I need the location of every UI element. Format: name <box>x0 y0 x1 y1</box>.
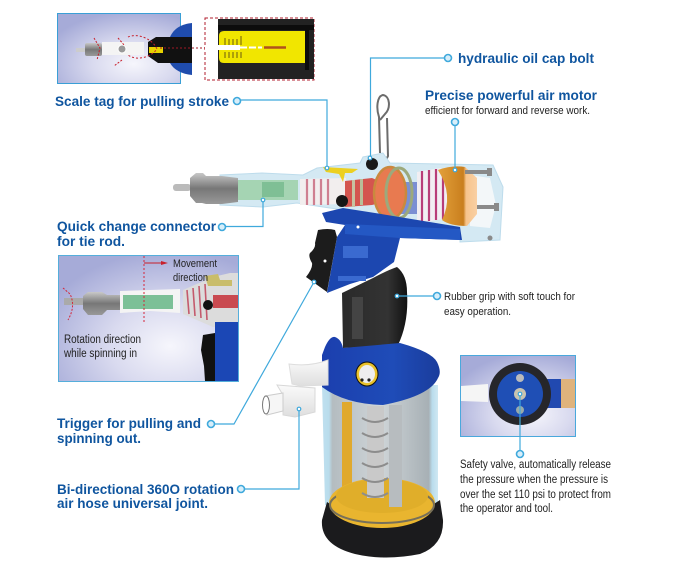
panel: safety valve top view <box>460 356 576 436</box>
swivel air joint <box>262 360 328 417</box>
heading: air hose joint: air hose universal joint. <box>57 496 208 511</box>
leader markers <box>208 54 524 492</box>
text: movement direction: direction <box>173 272 208 284</box>
text: safety valve: the operator and tool. <box>460 503 553 515</box>
yellow piston disc <box>329 478 435 528</box>
spring <box>362 406 388 498</box>
text: safety valve: Safety valve, automatically release <box>460 459 611 471</box>
text: rotation direction: while spinning in <box>63 348 137 360</box>
blue reservoir cap <box>322 337 440 405</box>
black base <box>322 500 443 558</box>
heading: scale tag: Scale tag for pulling stroke <box>55 94 229 109</box>
blue handle <box>322 208 462 293</box>
transparent rear housing <box>220 153 503 242</box>
red piston <box>345 178 393 207</box>
nose and connector <box>173 173 298 204</box>
front bellows <box>300 178 346 205</box>
leader end dots <box>261 156 522 411</box>
air motor blue core <box>400 182 422 214</box>
rubber grip <box>342 267 407 348</box>
rear bolts <box>465 168 499 240</box>
heading: quick change connector: Quick change connector <box>57 219 217 234</box>
text: movement direction: Movement <box>173 258 217 270</box>
pressure gauge <box>356 362 378 386</box>
hook ring <box>377 95 389 160</box>
text: safety valve: over the set 110 psi to protect from <box>460 489 611 501</box>
heading: precise powerful air motor: Precise powerful air motor <box>425 88 598 103</box>
text: rubber grip: easy operation. <box>444 306 511 318</box>
yellow rod <box>342 402 352 498</box>
text: safety valve: the pressure when the pressure is <box>460 474 608 486</box>
oil cap bolt and black knobs <box>366 158 378 170</box>
panel: scale tag overview photo <box>58 14 205 84</box>
heading: trigger: Trigger for pulling and <box>57 416 201 431</box>
orange motor sleeve <box>438 166 477 226</box>
black trigger <box>306 229 337 292</box>
text: motor description: efficient for forward and reverse work. <box>425 105 590 117</box>
heading: trigger: spinning out. <box>57 431 141 446</box>
yellow scale tag <box>323 167 358 182</box>
text: rubber grip: Rubber grip with soft touch for <box>444 291 575 303</box>
heading: quick change connector: for tie rod. <box>57 234 125 249</box>
heading: air hose joint: Bi-directional 360O rotation <box>57 482 234 497</box>
motor rings <box>374 167 406 219</box>
heading: hydraulic oil cap bolt: hydraulic oil cap bolt <box>458 51 594 66</box>
gray rod <box>389 405 402 507</box>
transparent reservoir cylinder <box>322 385 438 518</box>
air motor bellows <box>417 168 450 222</box>
panel: rotation and movement detail <box>58 256 238 382</box>
text: rotation direction: Rotation direction <box>64 334 141 346</box>
white rear interior <box>470 175 496 228</box>
panel: scale tag detail <box>205 18 314 80</box>
leader lines <box>215 58 520 489</box>
illustration: rivet tool <box>173 95 503 558</box>
